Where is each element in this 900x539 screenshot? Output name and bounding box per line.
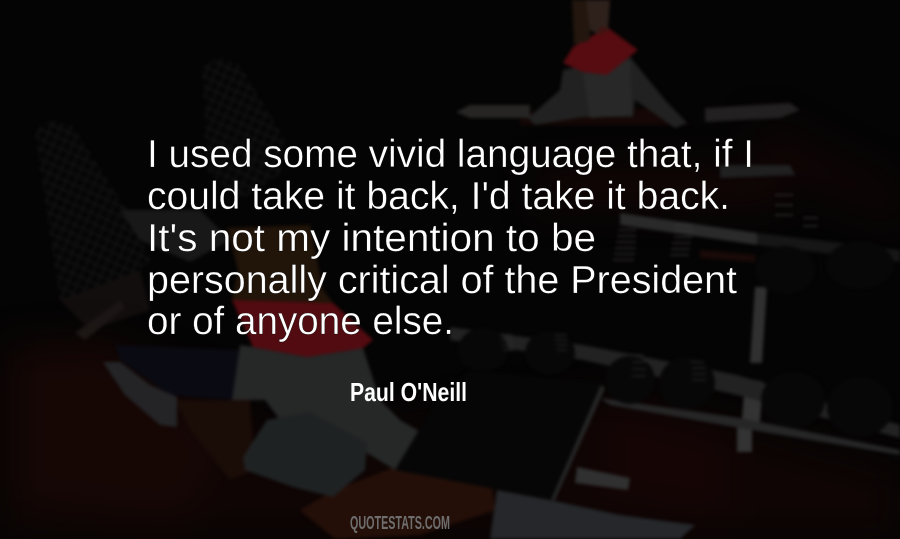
quote line 1: I used some vivid language that, if I	[147, 133, 754, 176]
leg left, skin	[175, 400, 255, 480]
lower bars	[450, 327, 900, 438]
navy cloth behind	[115, 345, 240, 400]
quote line 3: It's not my intention to be	[147, 217, 596, 260]
figure: woman doing splits, background	[456, 0, 800, 128]
quote line 2: could take it back, I'd take it back.	[147, 175, 730, 218]
sock right	[490, 490, 695, 539]
sock left	[103, 362, 177, 427]
watermark: QUOTESTATS.COM	[350, 513, 450, 533]
bench	[395, 370, 603, 500]
red hood	[563, 27, 638, 75]
sweater arms and torso	[528, 57, 687, 128]
red hood	[232, 300, 373, 357]
torso	[232, 345, 462, 470]
hair	[227, 225, 333, 303]
shorts	[243, 412, 367, 497]
floor glow	[0, 120, 900, 539]
legs	[520, 108, 690, 125]
head and hair	[572, 0, 590, 45]
figure: woman doing splits, foreground	[103, 225, 695, 539]
spring stacks upper	[613, 195, 818, 260]
dumbbell plates	[458, 241, 894, 437]
quote line 5: or of anyone else.	[147, 300, 454, 343]
upper bars	[620, 213, 757, 245]
author name: Paul O'Neill	[350, 377, 467, 407]
quote text	[147, 133, 754, 343]
weight rack towers left	[35, 57, 285, 340]
vertical post	[750, 287, 767, 363]
leg right, skin	[300, 465, 495, 539]
dumbbell rack right	[450, 165, 900, 455]
quote line 4: personally critical of the President	[147, 259, 737, 302]
